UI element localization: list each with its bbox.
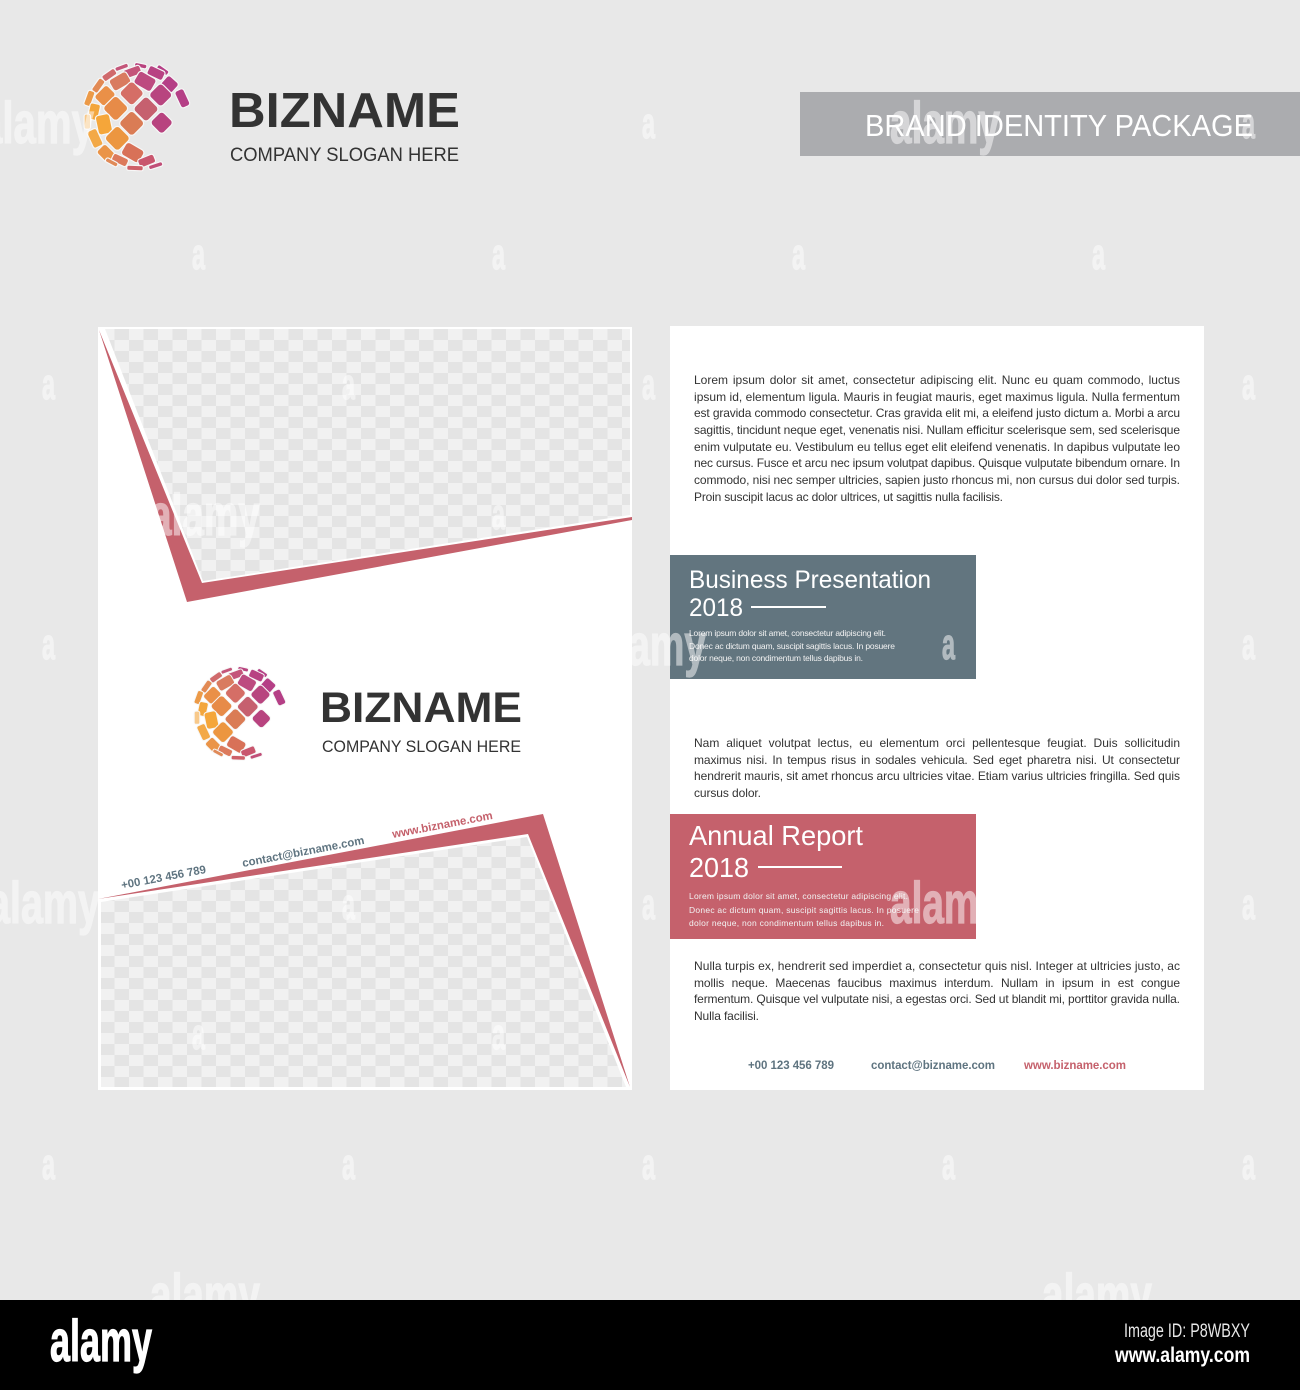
rotated contact details [120,810,494,892]
footer bar [0,1300,1300,1390]
accent band: bottom [98,814,630,1087]
panel: brochure cover [98,327,632,1090]
text block: intro paragraph [694,373,1180,504]
callout: annual report: Donec ac dictum quam, suscipit sagittis lacus. In posuere [689,905,919,915]
contact footer: www.bizname.com [1023,1060,1126,1072]
callout: business presentation: Donec ac dictum quam, suscipit sagittis lacus. In posuere [689,641,895,651]
watermarks: a [942,620,955,669]
rotated contact details: www.bizname.com [390,810,494,841]
brand name: BIZNAME [229,84,460,138]
panel: brochure inside page [670,326,1204,1090]
banner: brand identity package [800,92,1300,156]
text block: closing paragraph: mollis neque. Maecenas faucibus maximus interdum. Nullam in ipsum in est congue [694,976,1180,990]
text block: middle paragraph: maximus nisi. In tempus risus in sodales vehicula. Sed eget pharetra nisi. Ut consectetur [694,753,1180,767]
text block: middle paragraph [694,736,1180,800]
cover logo [194,667,522,760]
watermarks: a [492,230,505,279]
rotated contact details: +00 123 456 789 [120,864,207,892]
watermarks: alamy [150,1263,260,1328]
text block: middle paragraph: hendrerit mauris, sit amet rhoncus arcu ultricies vitae. Etiam varius ultricies fringilla. Sed quis [694,769,1180,783]
watermarks: alamy [890,871,1000,936]
text block: closing paragraph [694,959,1180,1023]
callout: annual report: Annual Report [689,820,863,851]
text block: closing paragraph: fermentum. Quisque vel vulputate nisi, a egestas orci. Sed ut blandit mi, porttitor gravida nulla. [694,992,1180,1006]
photo placeholder: bottom [101,837,626,1087]
watermarks: a [642,880,655,929]
alamy wordmark: alamy [50,1309,152,1374]
watermarks: a [1242,360,1255,409]
contact footer: +00 123 456 789 [748,1060,834,1072]
text block: intro paragraph: sagittis, tincidunt neque eget, venenatis nisi. Nullam efficitur scelerisque sem, sed scelerisque [694,423,1180,437]
cover brand name: BIZNAME [320,684,522,732]
header logo [84,63,460,170]
text block: closing paragraph: Nulla facilisi. [694,1009,759,1023]
callout: business presentation [670,555,976,679]
text block: intro paragraph: Lorem ipsum dolor sit amet, consectetur adipiscing elit. Nunc eu quam commodo, luctus [694,373,1180,387]
callout: annual report: dolor neque, non condimentum tellus dapibus in. [689,918,884,928]
text block: intro paragraph: ipsum id, elementum ligula. Mauris in feugiat mauris, eget maximus ligula. Nulla fermentum [694,390,1180,404]
text block: intro paragraph: nec cursus. Fusce et arcu nec ipsum volutpat dapibus. Quisque vulputate bibendum ornare. In [694,456,1180,470]
text block: intro paragraph: Proin suscipit lacus ac dolor ultrices, ut sagittis nulla facilisis. [694,490,1003,504]
callout: annual report: 2018 [689,852,749,883]
text block: middle paragraph: Nam aliquet volutpat lectus, eu elementum orci pellentesque feugiat. Duis sollicitudin [694,736,1180,750]
watermarks: a [642,99,655,148]
text block: intro paragraph: commodo, nisi nec semper ultricies, sapien justo rhoncus mi, non cursus dui dolor sed turpis. [694,473,1180,487]
contact footer: contact@bizname.com [871,1060,995,1072]
text block: closing paragraph: Nulla turpis ex, hendrerit sed imperdiet a, consectetur quis nisl. Integer at ultricies justo, ac [694,959,1180,973]
watermarks: alamy [890,91,1000,156]
callout: business presentation: Lorem ipsum dolor sit amet, consectetur adipiscing elit. [689,628,886,638]
watermarks: a [642,360,655,409]
banner: brand identity package: BRAND IDENTITY PACKAGE [865,108,1253,143]
watermarks: a [1242,1140,1255,1189]
site address: www.alamy.com [1114,1344,1250,1367]
text block: intro paragraph: enim vulputate eu. Vestibulum eu tellus eget elit eleifend venenatis. In dapibus vulputate leo [694,440,1180,454]
watermarks: a [492,1010,505,1059]
accent band: top [99,330,632,602]
watermarks: a [1092,230,1105,279]
rotated contact details: contact@bizname.com [241,835,365,870]
watermarks: a [1242,99,1255,148]
watermarks: a [42,1140,55,1189]
cover slogan: COMPANY SLOGAN HERE [322,738,521,756]
callout: business presentation: 2018 [689,594,743,622]
watermarks: a [42,360,55,409]
watermarks: a [642,1140,655,1189]
callout: business presentation: dolor neque, non condimentum tellus dapibus in. [689,653,863,663]
watermarks: a [192,230,205,279]
image id: Image ID: P8WBXY [1124,1321,1250,1342]
watermarks: a [192,1010,205,1059]
watermarks: a [1242,880,1255,929]
photo placeholder: top [105,329,630,581]
watermarks: a [42,620,55,669]
text block: intro paragraph: est gravida commodo consectetur. Cras gravida elit mi, a eleifend justo dictum a. Morbi a arcu [694,406,1180,420]
watermarks: alamy [1042,1263,1152,1328]
watermarks: alamy [596,613,706,678]
icon: globe [194,667,286,760]
callout: annual report: Lorem ipsum dolor sit amet, consectetur adipiscing elit. [689,891,908,901]
callout: business presentation: Business Presentation [689,566,931,594]
watermarks: a [342,360,355,409]
watermarks: alamy [150,483,260,548]
watermarks: a [342,880,355,929]
icon: globe [84,63,190,170]
watermarks: a [492,490,505,539]
slogan: COMPANY SLOGAN HERE [230,145,459,166]
watermarks: a [792,230,805,279]
text block: middle paragraph: cursus dolor. [694,786,761,800]
watermarks: a [942,1140,955,1189]
watermarks: a [342,1140,355,1189]
watermarks: a [1242,620,1255,669]
contact footer [748,1060,1126,1072]
callout: annual report [670,814,976,939]
